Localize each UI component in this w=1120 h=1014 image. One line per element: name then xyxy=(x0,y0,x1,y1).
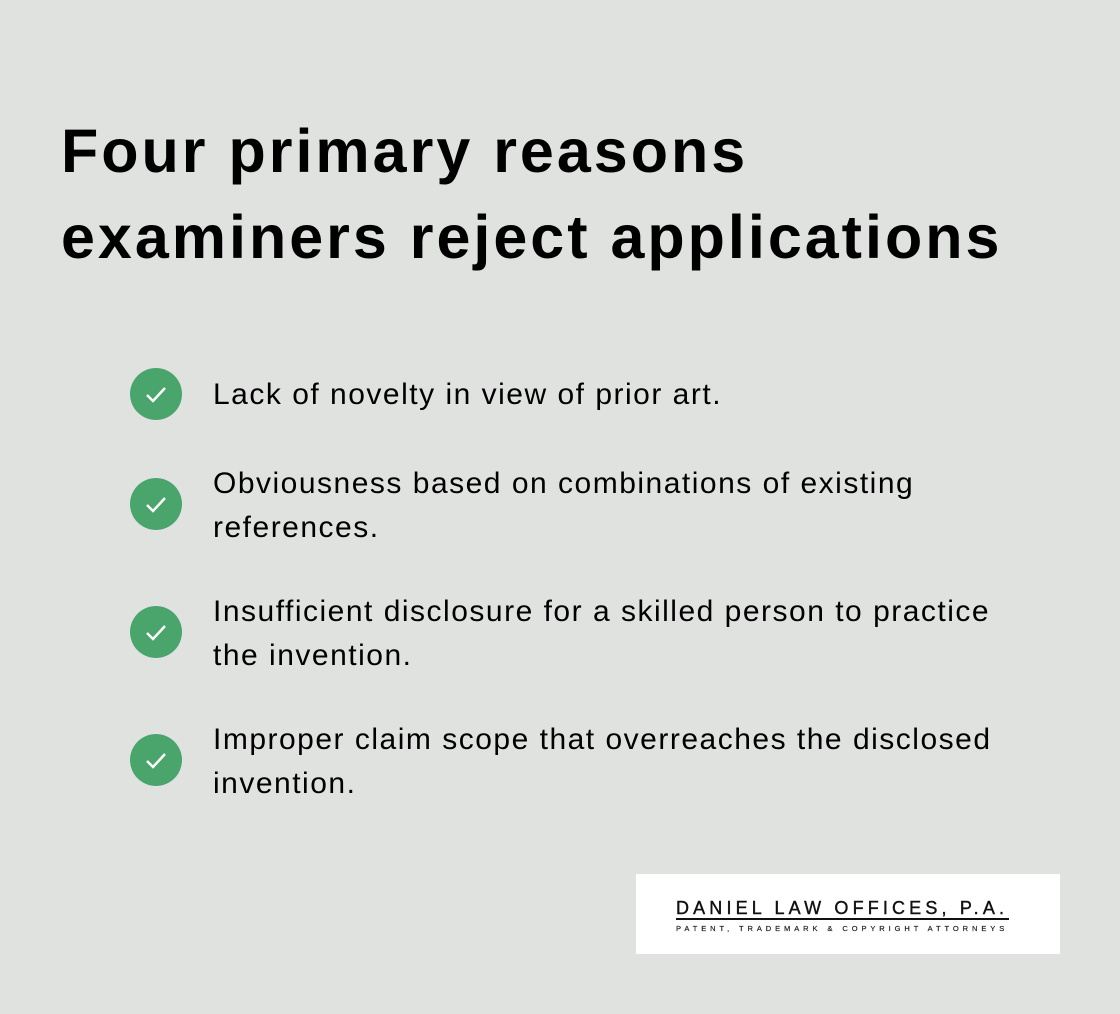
text xyxy=(213,467,914,544)
icon: check xyxy=(130,478,182,530)
logo: PATENT, TRADEMARK & COPYRIGHT ATTORNEYS xyxy=(676,924,1008,933)
text: Improper claim scope that overreaches the disclosed xyxy=(213,723,992,756)
text: the invention. xyxy=(213,639,412,672)
logo: DANIEL LAW OFFICES, P.A. xyxy=(676,898,1008,918)
icon: check xyxy=(130,606,182,658)
text xyxy=(213,723,992,800)
text: invention. xyxy=(213,767,356,800)
item 3 xyxy=(130,595,990,672)
item 2 xyxy=(130,467,914,544)
icon: check xyxy=(130,368,182,420)
item 1 xyxy=(130,368,722,420)
logo xyxy=(636,874,1060,954)
text: Obviousness based on combinations of existing xyxy=(213,467,914,500)
title: Four primary reasons xyxy=(61,117,748,185)
icon: check xyxy=(130,734,182,786)
title: examiners reject applications xyxy=(61,203,1002,271)
text xyxy=(213,595,990,672)
text: references. xyxy=(213,511,380,544)
text: Insufficient disclosure for a skilled person to practice xyxy=(213,595,990,628)
title xyxy=(61,117,1002,271)
item 4 xyxy=(130,723,992,800)
text: Lack of novelty in view of prior art. xyxy=(213,378,722,411)
